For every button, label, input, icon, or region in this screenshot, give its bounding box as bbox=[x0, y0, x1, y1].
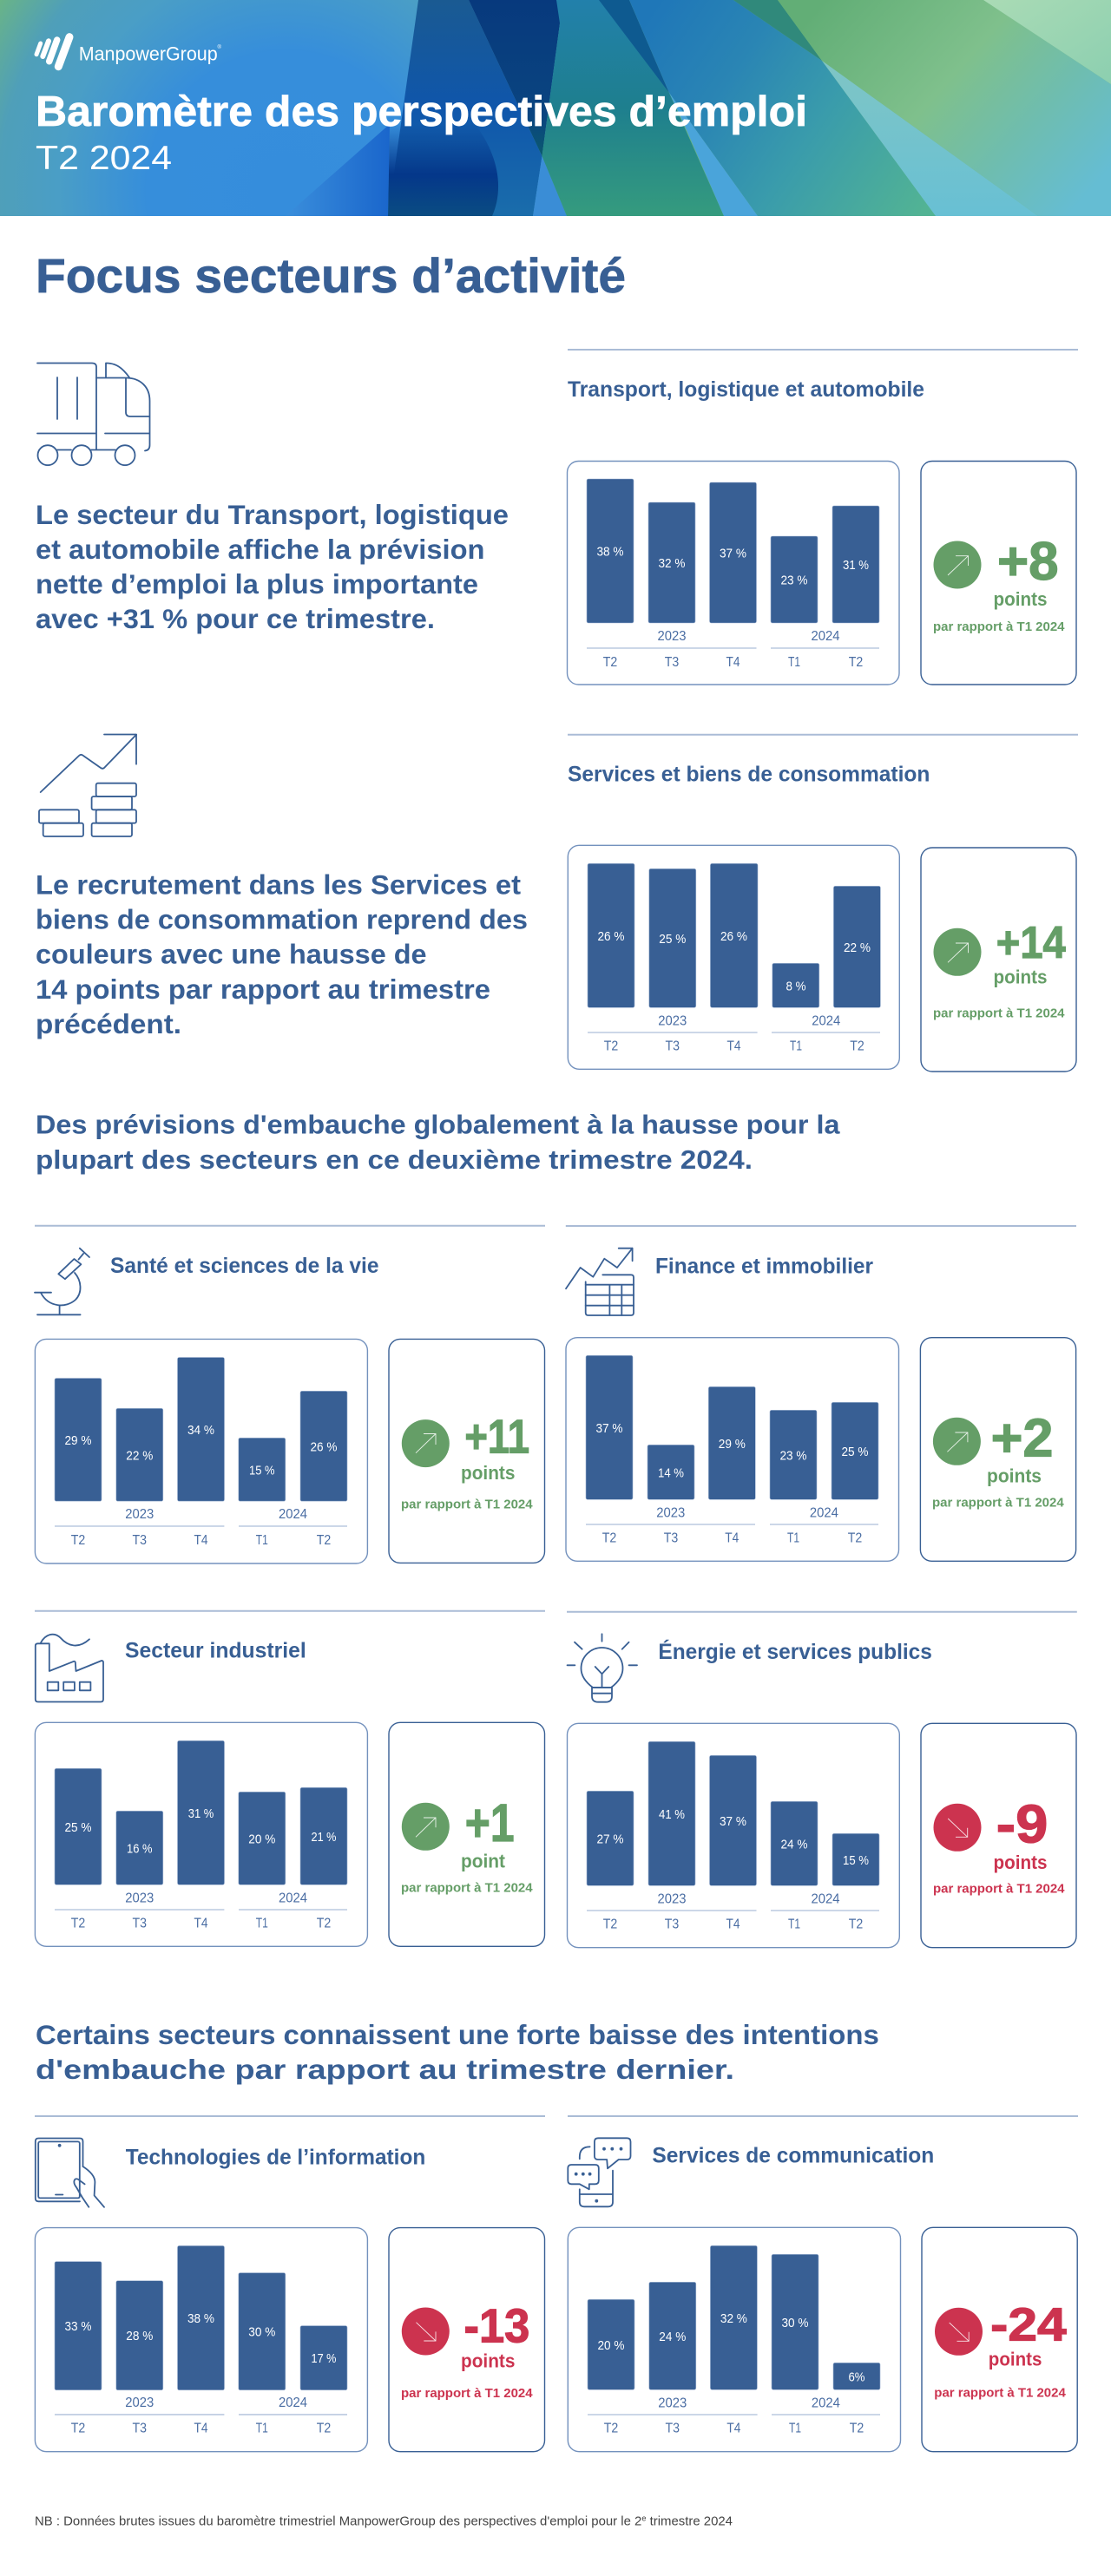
icon: microscope bbox=[35, 1249, 89, 1314]
delta card: par rapport à T1 2024 bbox=[933, 1007, 1064, 1021]
bar chart: T2 bbox=[71, 2422, 85, 2436]
bar chart: T4 bbox=[194, 1533, 208, 1548]
section heading: baisse: Certains secteurs connaissent une forte baisse des intentions bbox=[36, 2019, 879, 2050]
panel: transport text bbox=[36, 363, 509, 634]
bar chart: T2 bbox=[603, 655, 617, 670]
delta card: par rapport à T1 2024 bbox=[401, 1498, 533, 1511]
icon: up arrow bbox=[934, 928, 981, 976]
delta value: +14 bbox=[996, 918, 1066, 968]
bar chart: T4 bbox=[726, 2422, 740, 2436]
bar chart: T2 bbox=[71, 1533, 85, 1548]
bar chart: 15 % bbox=[249, 1463, 275, 1478]
bar chart: 2024 bbox=[279, 1507, 307, 1522]
delta card: points bbox=[993, 1852, 1047, 1873]
logo: ManpowerGroup bbox=[79, 43, 218, 64]
bar chart: 32 % bbox=[720, 2311, 747, 2326]
page heading: Focus secteurs d’activité bbox=[36, 248, 626, 303]
icon: truck bbox=[37, 363, 149, 465]
bar chart: T3 bbox=[666, 2422, 680, 2436]
bar chart: 2023 bbox=[658, 629, 687, 644]
bar chart: 28 % bbox=[126, 2329, 153, 2343]
section heading: hausse: Des prévisions d'embauche globalement à la hausse pour la bbox=[36, 1110, 840, 1140]
bar chart: 2024 bbox=[811, 629, 840, 644]
delta card bbox=[389, 1339, 545, 1563]
bar chart: 25 % bbox=[659, 932, 686, 947]
icon: factory bbox=[36, 1635, 103, 1702]
bar chart: 2024 bbox=[279, 2396, 307, 2410]
delta card bbox=[922, 2227, 1077, 2452]
delta value: +1 bbox=[465, 1793, 515, 1852]
delta card bbox=[389, 2228, 545, 2452]
delta card: par rapport à T1 2024 bbox=[933, 1883, 1064, 1897]
bar chart: T2 bbox=[849, 1917, 863, 1932]
delta card: par rapport à T1 2024 bbox=[934, 2387, 1066, 2401]
bar chart: 2023 bbox=[658, 2396, 687, 2410]
bar chart: 22 % bbox=[844, 941, 871, 955]
text: transport: avec +31 % pour ce trimestre. bbox=[36, 603, 435, 634]
delta card: points bbox=[993, 966, 1047, 987]
text: consumer: biens de consommation reprend des bbox=[36, 904, 528, 935]
text: transport: et automobile affiche la prévision bbox=[36, 534, 484, 565]
icon: finance chart and table bbox=[566, 1249, 634, 1315]
panel: consumer text bbox=[36, 734, 528, 1039]
bar chart: 15 % bbox=[843, 1853, 869, 1868]
bar chart: T2 bbox=[317, 1533, 331, 1548]
bar chart: 26 % bbox=[311, 1439, 337, 1454]
bar chart: 2024 bbox=[812, 1014, 840, 1029]
section heading: baisse bbox=[36, 2019, 879, 2085]
delta card: point bbox=[461, 1851, 506, 1872]
delta card: points bbox=[987, 1465, 1042, 1486]
icon: up arrow bbox=[934, 541, 981, 588]
delta value: -9 bbox=[996, 1794, 1048, 1854]
bar chart: 2023 bbox=[658, 1014, 687, 1029]
icon: down arrow bbox=[402, 2308, 450, 2355]
bar chart: T1 bbox=[790, 1039, 802, 1054]
bar chart: 33 % bbox=[64, 2319, 92, 2334]
bar chart: 2023 bbox=[658, 1891, 687, 1906]
bar chart: T2 bbox=[71, 1917, 85, 1931]
sector heading: Transport, logistique et automobile bbox=[568, 377, 924, 402]
bar chart: T3 bbox=[133, 1533, 147, 1548]
bar chart: 2024 bbox=[279, 1891, 307, 1905]
bar chart: 6% bbox=[849, 2370, 864, 2384]
bar chart: T1 bbox=[788, 1917, 800, 1932]
bar chart: T1 bbox=[256, 1533, 268, 1548]
bar chart: 2023 bbox=[125, 2396, 154, 2410]
delta value: -13 bbox=[463, 2298, 529, 2352]
bar chart: 37 % bbox=[720, 547, 746, 560]
delta card: points bbox=[989, 2349, 1042, 2370]
icon: chat on phone bbox=[568, 2138, 630, 2206]
panel: santé bbox=[35, 1226, 545, 1563]
delta card bbox=[389, 1722, 545, 1946]
panel: transport chart bbox=[568, 350, 1078, 685]
bar chart: T1 bbox=[788, 655, 800, 670]
delta card: par rapport à T1 2024 bbox=[933, 620, 1064, 634]
sector heading: Santé et sciences de la vie bbox=[110, 1254, 379, 1278]
bar chart: T2 bbox=[850, 2422, 864, 2436]
text: consumer bbox=[36, 869, 528, 1039]
bar chart: 38 % bbox=[187, 2311, 214, 2326]
bar chart: T2 bbox=[604, 1039, 618, 1054]
bar chart: T4 bbox=[727, 1039, 741, 1054]
footnote: trimestre 2024 bbox=[646, 2515, 733, 2529]
section heading: hausse bbox=[36, 1110, 840, 1175]
logo: ® bbox=[217, 44, 222, 50]
bar chart: 26 % bbox=[720, 929, 747, 944]
bar chart: T2 bbox=[848, 1531, 862, 1546]
bar chart: T2 bbox=[602, 1531, 616, 1546]
text: consumer: précédent. bbox=[36, 1008, 181, 1039]
panel: énergie bbox=[567, 1612, 1077, 1948]
panel: finance bbox=[566, 1226, 1076, 1561]
bar chart: 24 % bbox=[659, 2330, 686, 2344]
bar chart: T3 bbox=[664, 1531, 678, 1546]
bar chart: T3 bbox=[133, 1917, 147, 1931]
panel: consumer chart bbox=[568, 735, 1078, 1072]
delta value: +8 bbox=[997, 532, 1059, 592]
delta value: +2 bbox=[991, 1408, 1054, 1468]
bar chart: T2 bbox=[850, 1039, 864, 1054]
sector heading: Finance et immobilier bbox=[655, 1254, 873, 1278]
bar chart: 16 % bbox=[127, 1841, 153, 1856]
bar chart: 25 % bbox=[64, 1820, 92, 1835]
bar chart: 21 % bbox=[311, 1830, 337, 1845]
bar chart: 2024 bbox=[812, 2396, 840, 2410]
bar chart: T4 bbox=[194, 2422, 208, 2436]
bar chart: 2024 bbox=[811, 1891, 840, 1906]
bar chart bbox=[568, 1723, 899, 1948]
bar chart: T1 bbox=[256, 2422, 268, 2436]
bar chart bbox=[35, 2228, 367, 2452]
bar chart: 29 % bbox=[719, 1437, 746, 1452]
logo bbox=[36, 37, 222, 67]
icon: up arrow bbox=[402, 1803, 450, 1851]
bar chart: T1 bbox=[787, 1531, 799, 1546]
bar chart: 37 % bbox=[595, 1421, 623, 1436]
text: transport: Le secteur du Transport, logistique bbox=[36, 499, 509, 530]
bar chart: 38 % bbox=[597, 545, 623, 559]
bar chart: 32 % bbox=[658, 556, 686, 571]
bar chart: T3 bbox=[666, 1039, 680, 1054]
bar chart: 30 % bbox=[781, 2316, 809, 2330]
text: consumer: couleurs avec une hausse de bbox=[36, 939, 427, 970]
footnote: e bbox=[641, 2514, 646, 2523]
subtitle: T2 2024 bbox=[36, 140, 172, 177]
sector heading: Secteur industriel bbox=[125, 1639, 306, 1663]
delta card: points bbox=[461, 1462, 515, 1484]
bar chart: T3 bbox=[665, 1917, 679, 1932]
bar chart bbox=[566, 1338, 899, 1561]
bar chart: T4 bbox=[725, 1531, 739, 1546]
bar chart: T2 bbox=[849, 655, 863, 670]
sector heading: Services de communication bbox=[652, 2144, 934, 2168]
panel: communication bbox=[568, 2116, 1078, 2452]
bar chart: 24 % bbox=[781, 1837, 807, 1852]
sector heading: Services et biens de consommation bbox=[568, 763, 930, 787]
bar chart: 26 % bbox=[597, 929, 625, 944]
header banner bbox=[0, 0, 1111, 216]
bar chart: T4 bbox=[194, 1917, 208, 1931]
bar chart: 17 % bbox=[311, 2351, 337, 2366]
text: consumer: 14 points par rapport au trimestre bbox=[36, 973, 490, 1005]
section heading: baisse: d'embauche par rapport au trimestre dernier. bbox=[36, 2054, 734, 2085]
panel: technologies bbox=[35, 2116, 545, 2452]
bar chart bbox=[568, 845, 899, 1069]
bar chart: 27 % bbox=[597, 1832, 623, 1846]
text: transport bbox=[36, 499, 509, 634]
bar chart: 31 % bbox=[843, 558, 869, 573]
bar chart: 23 % bbox=[781, 573, 807, 588]
bar chart: T1 bbox=[256, 1917, 268, 1931]
bar chart: 2023 bbox=[125, 1507, 154, 1522]
sector heading: Énergie et services publics bbox=[658, 1639, 932, 1664]
footnote: NB : Données brutes issues du baromètre trimestriel ManpowerGroup des perspectives d'emploi pour le 2 bbox=[35, 2515, 625, 2529]
section heading: hausse: plupart des secteurs en ce deuxième trimestre 2024. bbox=[36, 1144, 753, 1175]
delta card: points bbox=[993, 588, 1047, 610]
bar chart: T2 bbox=[317, 2422, 331, 2436]
panel: industrie bbox=[35, 1611, 545, 1946]
icon: up arrow bbox=[402, 1419, 450, 1467]
bar chart: T2 bbox=[317, 1917, 331, 1931]
bar chart: 20 % bbox=[248, 1832, 275, 1846]
bar chart: T2 bbox=[604, 2422, 618, 2436]
bar chart: T4 bbox=[726, 1917, 740, 1932]
bar chart: 29 % bbox=[64, 1433, 92, 1448]
bar chart: 22 % bbox=[126, 1448, 153, 1463]
title: Baromètre des perspectives d’emploi bbox=[36, 88, 807, 135]
sector heading: Technologies de l’information bbox=[126, 2145, 425, 2169]
icon: up arrow bbox=[933, 1418, 981, 1465]
icon: down arrow bbox=[934, 1804, 981, 1852]
delta card bbox=[921, 462, 1076, 685]
bar chart: 14 % bbox=[658, 1465, 684, 1480]
bar chart: 41 % bbox=[659, 1807, 685, 1822]
bar chart: 37 % bbox=[720, 1814, 746, 1829]
delta card: par rapport à T1 2024 bbox=[401, 2387, 533, 2401]
bar chart bbox=[35, 1339, 367, 1563]
bar chart: 2024 bbox=[810, 1505, 838, 1520]
delta value: -24 bbox=[990, 2298, 1067, 2350]
delta card: par rapport à T1 2024 bbox=[932, 1497, 1064, 1511]
bar chart: 30 % bbox=[248, 2325, 275, 2340]
bar chart: 20 % bbox=[597, 2338, 625, 2353]
delta card: points bbox=[461, 2350, 515, 2371]
delta card bbox=[921, 848, 1076, 1072]
bar chart: T3 bbox=[665, 655, 679, 670]
bar chart: 2023 bbox=[125, 1891, 154, 1905]
bar chart: T3 bbox=[133, 2422, 147, 2436]
bar chart: 8 % bbox=[786, 979, 805, 993]
bar chart bbox=[568, 2227, 901, 2452]
bar chart: 23 % bbox=[779, 1448, 807, 1463]
icon: growth and coins bbox=[39, 734, 136, 836]
text: transport: nette d’emploi la plus importante bbox=[36, 568, 478, 600]
bar chart: T1 bbox=[789, 2422, 801, 2436]
text: consumer: Le recrutement dans les Services et bbox=[36, 869, 522, 901]
bar chart: T4 bbox=[726, 655, 740, 670]
bar chart: 31 % bbox=[188, 1806, 214, 1821]
bar chart: 34 % bbox=[187, 1423, 214, 1438]
icon: tablet in hand bbox=[36, 2138, 104, 2207]
delta value: +11 bbox=[464, 1409, 529, 1463]
banner gradient artwork bbox=[0, 0, 1111, 216]
bar chart bbox=[568, 462, 899, 685]
delta card bbox=[921, 1723, 1076, 1948]
delta card: par rapport à T1 2024 bbox=[401, 1882, 533, 1896]
icon: down arrow bbox=[935, 2308, 983, 2356]
icon: light bulb bbox=[568, 1634, 637, 1702]
bar chart bbox=[35, 1722, 367, 1946]
delta card bbox=[920, 1338, 1076, 1561]
bar chart: 25 % bbox=[842, 1445, 868, 1459]
bar chart: 2023 bbox=[656, 1505, 685, 1520]
bar chart: T2 bbox=[603, 1917, 617, 1932]
